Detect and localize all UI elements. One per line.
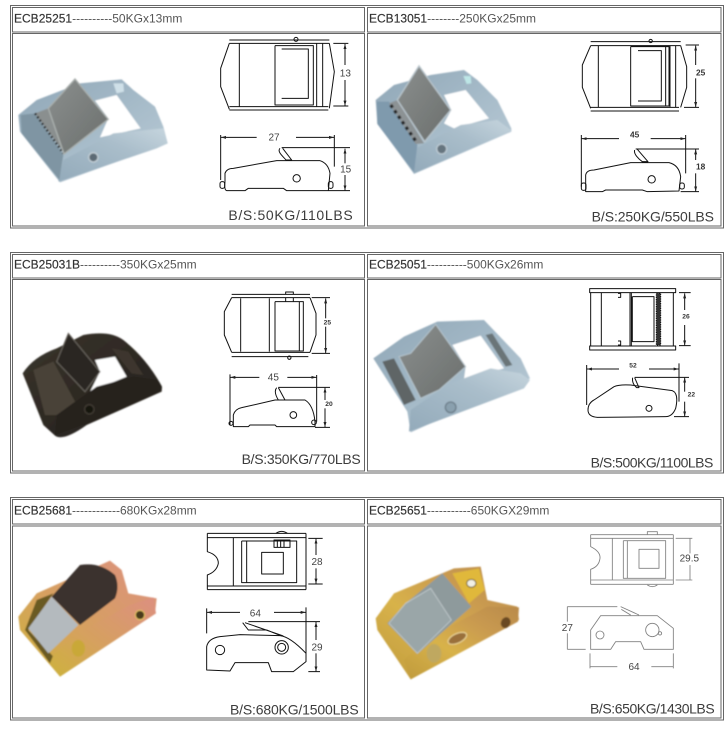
- drawing: top view, width 29.5: [591, 532, 699, 587]
- heading: ECB13051: ECB13051--------250KGx25mm: [369, 12, 536, 26]
- drawing: side view, 64 by 29: [207, 607, 323, 672]
- drawing: top view, width 29.5: 29.5: [680, 554, 699, 565]
- drawing: side view, 45 by 20: 20: [325, 401, 333, 408]
- panel: ECB25251: [12, 8, 364, 226]
- breaking strength label: B/S:350KG/770LBS: [242, 451, 361, 467]
- drawing: top view, width 25: 25: [324, 320, 331, 327]
- drawing: side view, 52 by 22: 52: [629, 363, 637, 370]
- drawing: top view, width 26: [590, 289, 691, 350]
- heading: ECB25251: ECB25251----------50KGx13mm: [14, 12, 182, 26]
- photo: zinc cam buckle 500KG: [373, 320, 530, 432]
- row 3 outer border: [10, 498, 724, 720]
- breaking strength label: B/S:250KG/550LBS: [592, 209, 714, 225]
- row 2 outer border: [10, 252, 724, 473]
- drawing: side view, 64 by 29: 64: [250, 609, 261, 620]
- drawing: top view, width 26: 26: [682, 314, 690, 321]
- drawing: side view, 45 by 18: 18: [696, 162, 706, 172]
- drawing: top view, width 28: [207, 531, 323, 590]
- photo: zinc cam buckle 50KG: [18, 79, 168, 182]
- drawing: side view, 52 by 22: 22: [688, 391, 695, 398]
- panel: ECB13051: [368, 8, 721, 226]
- drawing: top view, width 13: [221, 37, 351, 110]
- drawing: side view, 64 by 27: [562, 607, 673, 673]
- drawing: top view, width 25: [224, 292, 331, 359]
- breaking strength label: B/S:650KG/1430LBS: [590, 700, 715, 716]
- photo: gold cam buckle 650KG: [376, 567, 519, 679]
- breaking strength label: B/S:680KG/1500LBS: [230, 701, 359, 717]
- drawing: side view, 64 by 27: 27: [562, 623, 573, 634]
- drawing: side view, 64 by 29: 29: [311, 643, 323, 654]
- heading: ECB25681: ECB25681------------680KGx28mm: [14, 504, 197, 518]
- row 1 outer border: [10, 6, 724, 228]
- drawing: side view, 45 by 18: 45: [630, 130, 640, 140]
- photo: zinc cam buckle 250KG: [376, 66, 512, 174]
- heading: ECB25051: ECB25051----------500KGx26mm: [369, 258, 543, 272]
- photo: gold cam buckle with black cover 680KG: [18, 561, 157, 677]
- drawing: side view, 45 by 20: 45: [268, 372, 279, 383]
- heading: ECB25651: ECB25651-----------650KGX29mm: [369, 504, 549, 518]
- heading: ECB25031B: ECB25031B----------350KGx25mm: [14, 258, 197, 272]
- drawing: side view, 52 by 22: [587, 363, 695, 417]
- drawing: top view, width 28: 28: [311, 557, 323, 568]
- drawing: top view, width 13: 13: [340, 68, 351, 79]
- drawing: side view, 27 by 15: [220, 132, 352, 191]
- drawing: side view, 64 by 27: 64: [628, 662, 640, 673]
- drawing: top view, width 25: 25: [696, 67, 706, 77]
- drawing: side view, 45 by 20: [229, 372, 333, 427]
- photo: black cam buckle 350KG: [23, 333, 162, 437]
- drawing: side view, 27 by 15: 27: [268, 132, 280, 143]
- breaking strength label: B/S:500KG/1100LBS: [591, 455, 713, 471]
- panel: ECB25651: [368, 500, 721, 718]
- drawing: top view, width 25: [582, 39, 706, 111]
- panel: ECB25681: [12, 500, 364, 718]
- drawing: side view, 27 by 15: 15: [340, 164, 352, 175]
- drawing: side view, 45 by 18: [581, 130, 706, 192]
- breaking strength label: B/S:50KG/110LBS: [228, 207, 353, 223]
- panel: ECB25031B: [12, 254, 364, 471]
- panel: ECB25051: [368, 254, 721, 471]
